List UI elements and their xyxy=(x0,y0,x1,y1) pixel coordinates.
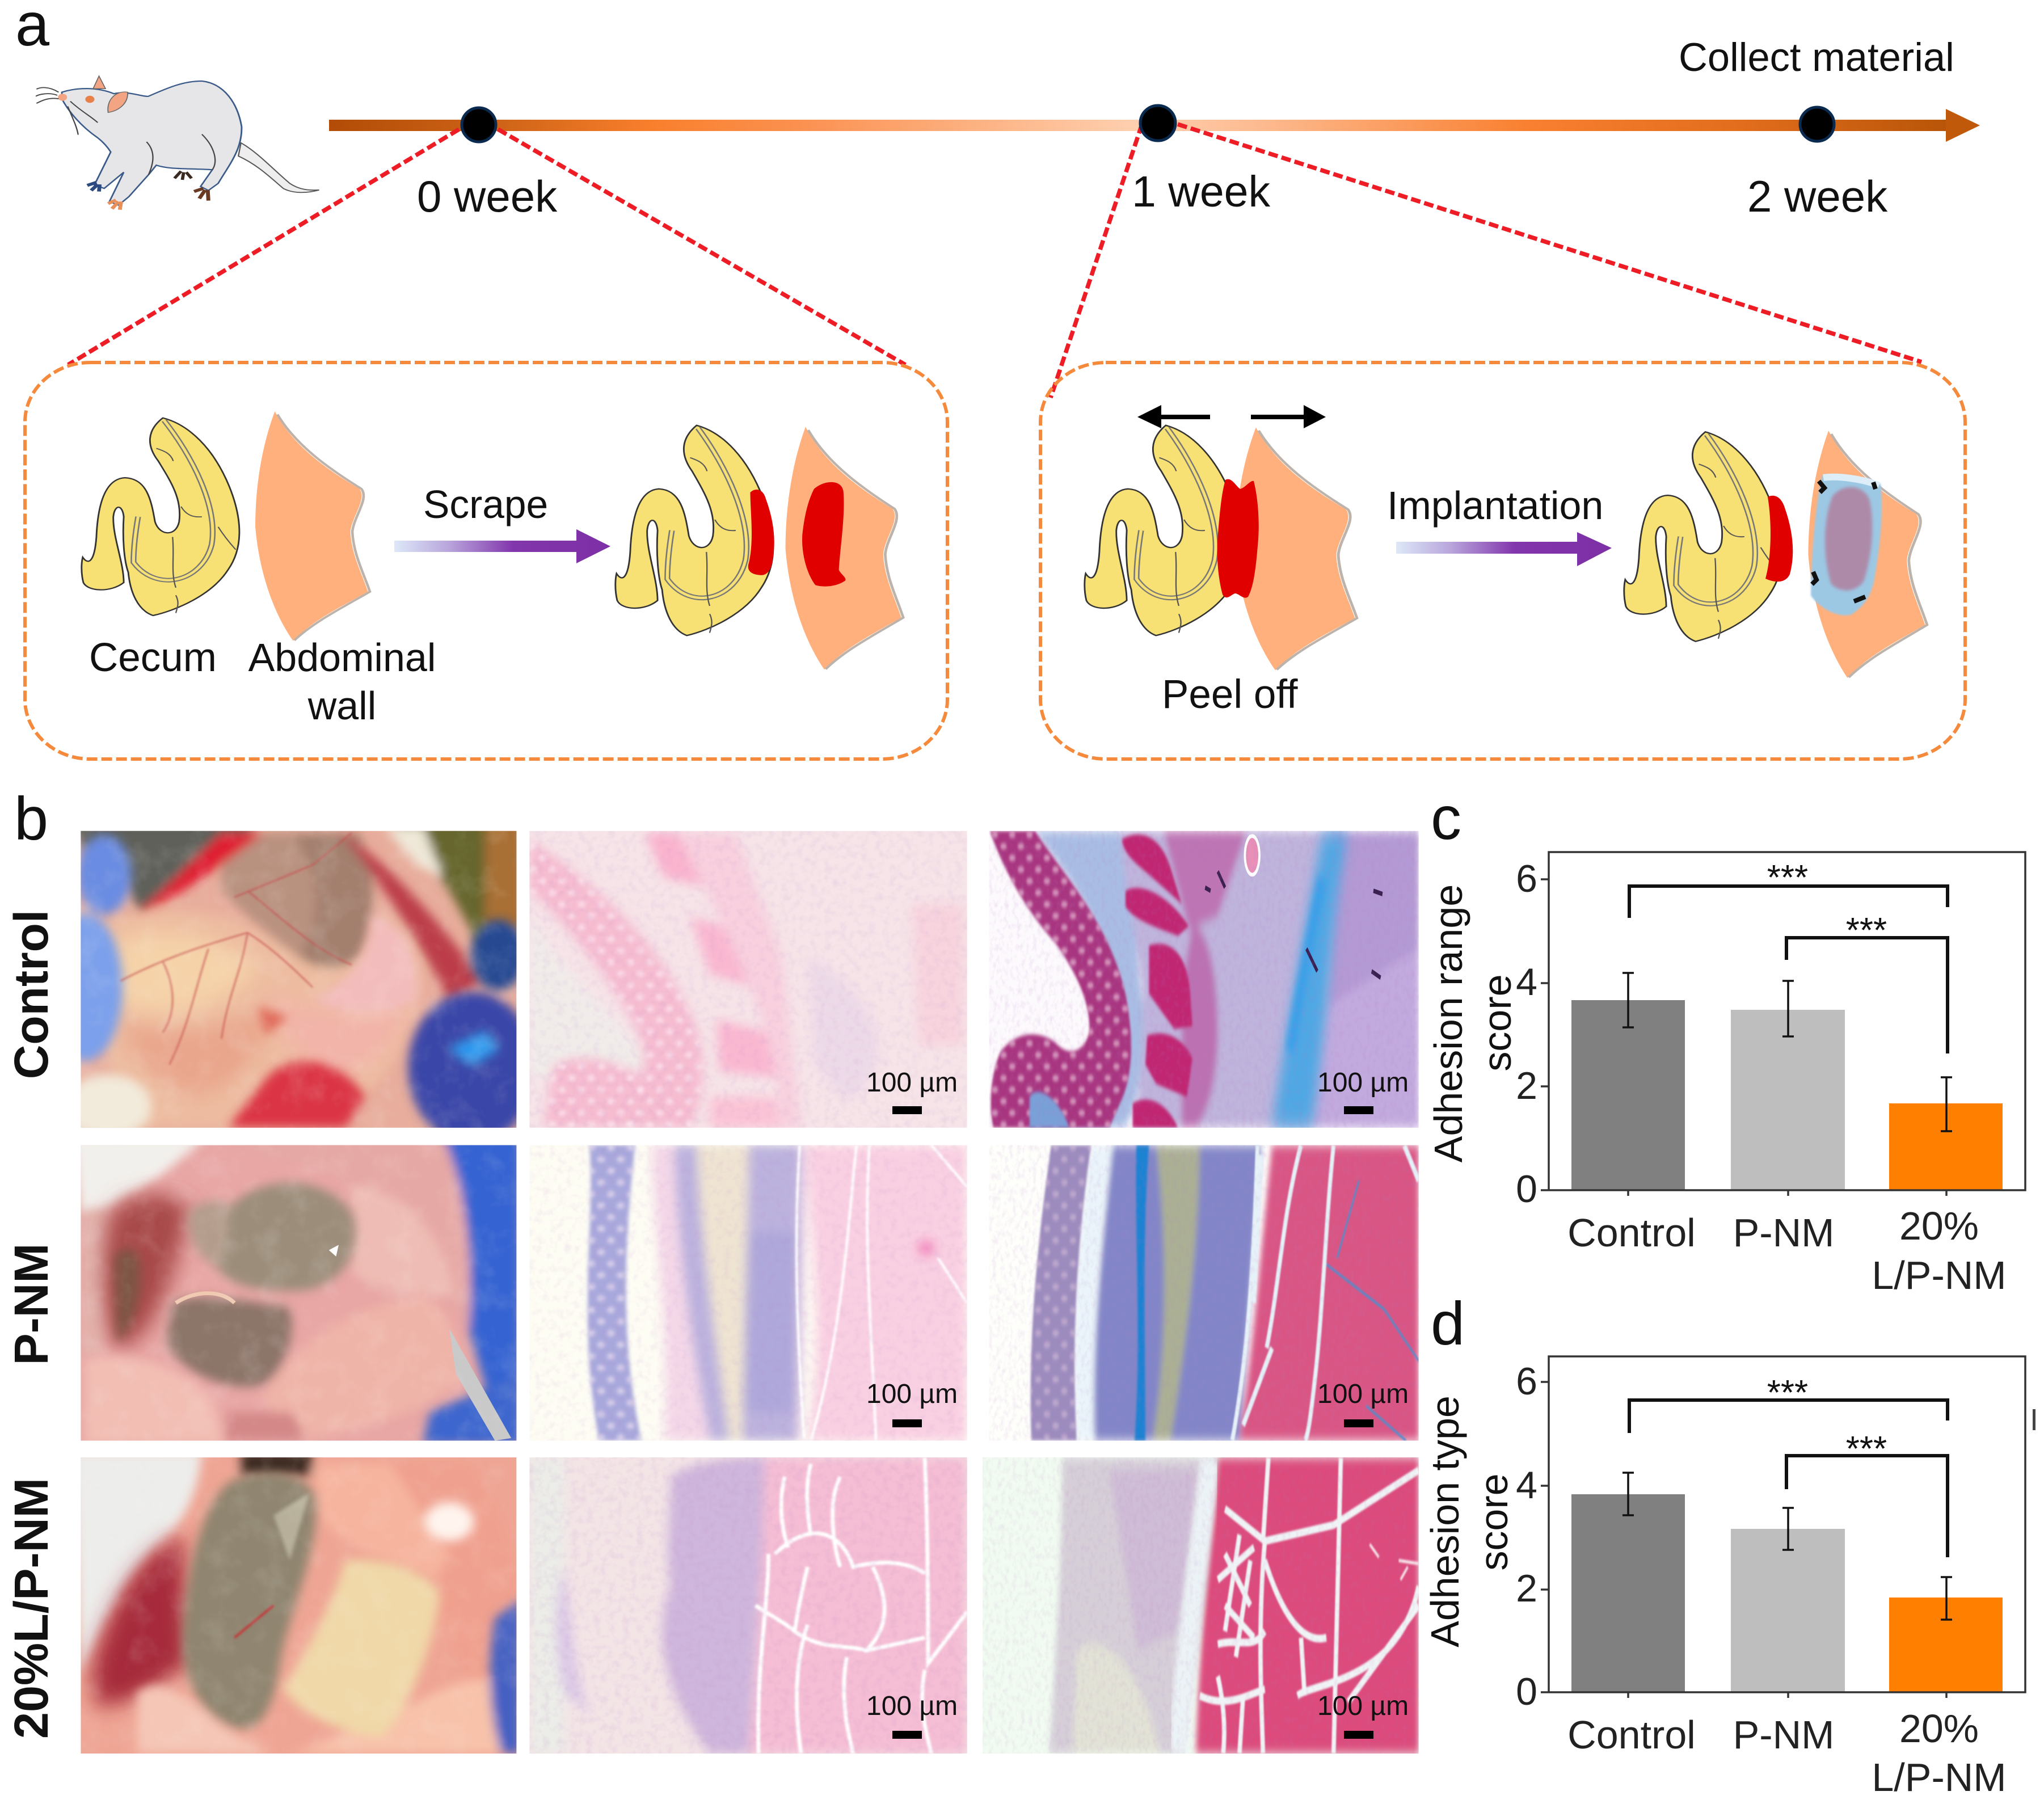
significance stars: *** xyxy=(1767,1373,1808,1413)
row label: Control: Control xyxy=(5,910,58,1079)
label: cecum: Cecum xyxy=(89,635,217,680)
implanted membrane xyxy=(1811,475,1882,616)
scale bars, H&E column: 100 µm xyxy=(866,1068,958,1098)
axes frame and ticks xyxy=(1541,1356,2025,1698)
scale bars, Masson column xyxy=(1317,1068,1409,1739)
y tick labels: 4 xyxy=(1516,1464,1537,1507)
significance stars xyxy=(1767,1373,1887,1469)
histology Masson: Control xyxy=(989,831,1419,1128)
x tick labels: 20% xyxy=(1899,1204,1979,1248)
significance brackets xyxy=(1629,1400,1948,1557)
chart d: adhesion type score xyxy=(1423,1356,2025,1799)
histology H&E: P-NM xyxy=(529,1145,967,1441)
label: peel off: Peel off xyxy=(1162,672,1298,717)
y axis title: Adhesion type xyxy=(1423,1396,1467,1647)
arrow: scrape xyxy=(394,529,610,563)
bars xyxy=(1571,1494,2003,1692)
scale bars, H&E column: 100 µm xyxy=(866,1379,958,1409)
arrow: pull left xyxy=(1137,405,1210,428)
x tick labels: L/P-NM xyxy=(1872,1755,2007,1799)
row label: 20%L/P-NM: 20%L/P-NM xyxy=(5,1478,58,1739)
panel: scrape procedure xyxy=(25,363,947,759)
arrow: implantation xyxy=(1396,532,1612,566)
histology H&E: 20%L/P-NM xyxy=(529,1457,967,1754)
error bars xyxy=(1622,1473,1952,1620)
significance stars: *** xyxy=(1767,858,1808,897)
y tick labels: 2 xyxy=(1516,1064,1537,1107)
bars xyxy=(1571,1000,2003,1190)
chart c: adhesion range score xyxy=(1426,852,2025,1297)
treated wound xyxy=(1765,496,1793,581)
gross photographs and H&E column xyxy=(47,814,967,1754)
histology Masson: P-NM xyxy=(989,1145,1419,1441)
illustration: rat xyxy=(36,76,319,210)
row label: P-NM: P-NM xyxy=(5,1244,58,1365)
x tick labels xyxy=(1567,1706,2007,1799)
y axis title: score xyxy=(1475,974,1519,1072)
scraped abdominal wall xyxy=(786,427,903,669)
label: implantation: Implantation xyxy=(1387,483,1603,528)
panel: peel off and implantation xyxy=(1040,363,1965,759)
histology Masson: 20%L/P-NM xyxy=(983,1457,1419,1754)
timeline node: 0 week xyxy=(462,108,496,142)
panel label b: b xyxy=(14,784,48,853)
cecum, peel off xyxy=(1085,425,1242,635)
treated cecum xyxy=(1624,432,1782,642)
wall, peel off xyxy=(1235,427,1357,670)
scale bars, Masson column: 100 µm xyxy=(1317,1068,1409,1098)
y tick labels: 0 xyxy=(1516,1167,1537,1211)
y axis title xyxy=(1423,1396,1516,1647)
y tick labels: 4 xyxy=(1516,960,1537,1004)
y tick labels: 6 xyxy=(1516,1360,1537,1403)
significance stars: *** xyxy=(1846,1430,1887,1469)
label: collect material: Collect material xyxy=(1679,35,1954,79)
significance brackets xyxy=(1629,886,1948,1053)
photo: Control xyxy=(81,831,516,1128)
photo: 20%L/P-NM xyxy=(71,1451,521,1754)
zoom lines from week 1 xyxy=(1051,124,1921,398)
photo: P-NM xyxy=(71,1136,521,1444)
zoom lines from week 0 xyxy=(68,129,905,365)
significance stars xyxy=(1767,858,1887,950)
histology H&E: Control xyxy=(529,831,967,1128)
histology Masson column xyxy=(983,831,1419,1754)
y tick labels: 6 xyxy=(1516,857,1537,900)
scraped cecum xyxy=(616,425,773,635)
scale bars, H&E column xyxy=(866,1068,958,1739)
y axis title xyxy=(1426,884,1519,1162)
abdominal wall xyxy=(255,411,370,641)
x tick labels: Control xyxy=(1567,1713,1696,1757)
x tick labels xyxy=(1567,1204,2007,1297)
y tick labels: 2 xyxy=(1516,1567,1537,1610)
y axis title: Adhesion range xyxy=(1426,884,1470,1162)
panel label c: c xyxy=(1431,783,1461,852)
timeline node: 1 week xyxy=(1140,106,1175,141)
label: 1 week: 1 week xyxy=(1132,167,1270,216)
stray tick mark xyxy=(2033,1409,2035,1430)
label: scrape: Scrape xyxy=(423,482,548,526)
x tick labels: L/P-NM xyxy=(1872,1253,2007,1297)
treated wall xyxy=(1808,431,1927,678)
y axis title: score xyxy=(1472,1473,1516,1571)
timeline node: 2 week xyxy=(1800,107,1834,141)
scale bars, Masson column: 100 µm xyxy=(1317,1379,1409,1409)
x tick labels: P-NM xyxy=(1733,1211,1834,1255)
y tick labels xyxy=(1516,857,1537,1211)
label: 0 week: 0 week xyxy=(417,171,558,221)
y tick labels: 0 xyxy=(1516,1670,1537,1713)
y tick labels xyxy=(1516,1360,1537,1713)
label: abdominal wall: Abdominal xyxy=(248,635,436,680)
x tick labels: P-NM xyxy=(1733,1713,1834,1757)
x tick labels: 20% xyxy=(1899,1706,1979,1751)
x tick labels: Control xyxy=(1567,1211,1696,1255)
error bars xyxy=(1622,973,1952,1131)
significance stars: *** xyxy=(1846,911,1887,950)
cecum xyxy=(82,418,239,616)
axes frame and ticks xyxy=(1541,852,2025,1196)
label: abdominal wall: wall xyxy=(307,684,376,728)
arrow: pull right xyxy=(1251,405,1326,428)
panel label d: d xyxy=(1431,1289,1465,1358)
wound on cecum xyxy=(748,490,774,575)
wound on wall xyxy=(802,482,845,587)
scale bars, Masson column: 100 µm xyxy=(1317,1691,1409,1721)
scale bars, H&E column: 100 µm xyxy=(866,1691,958,1721)
timeline arrow xyxy=(329,109,1980,142)
adhesion wound xyxy=(1217,479,1259,598)
label: 2 week: 2 week xyxy=(1747,171,1888,221)
